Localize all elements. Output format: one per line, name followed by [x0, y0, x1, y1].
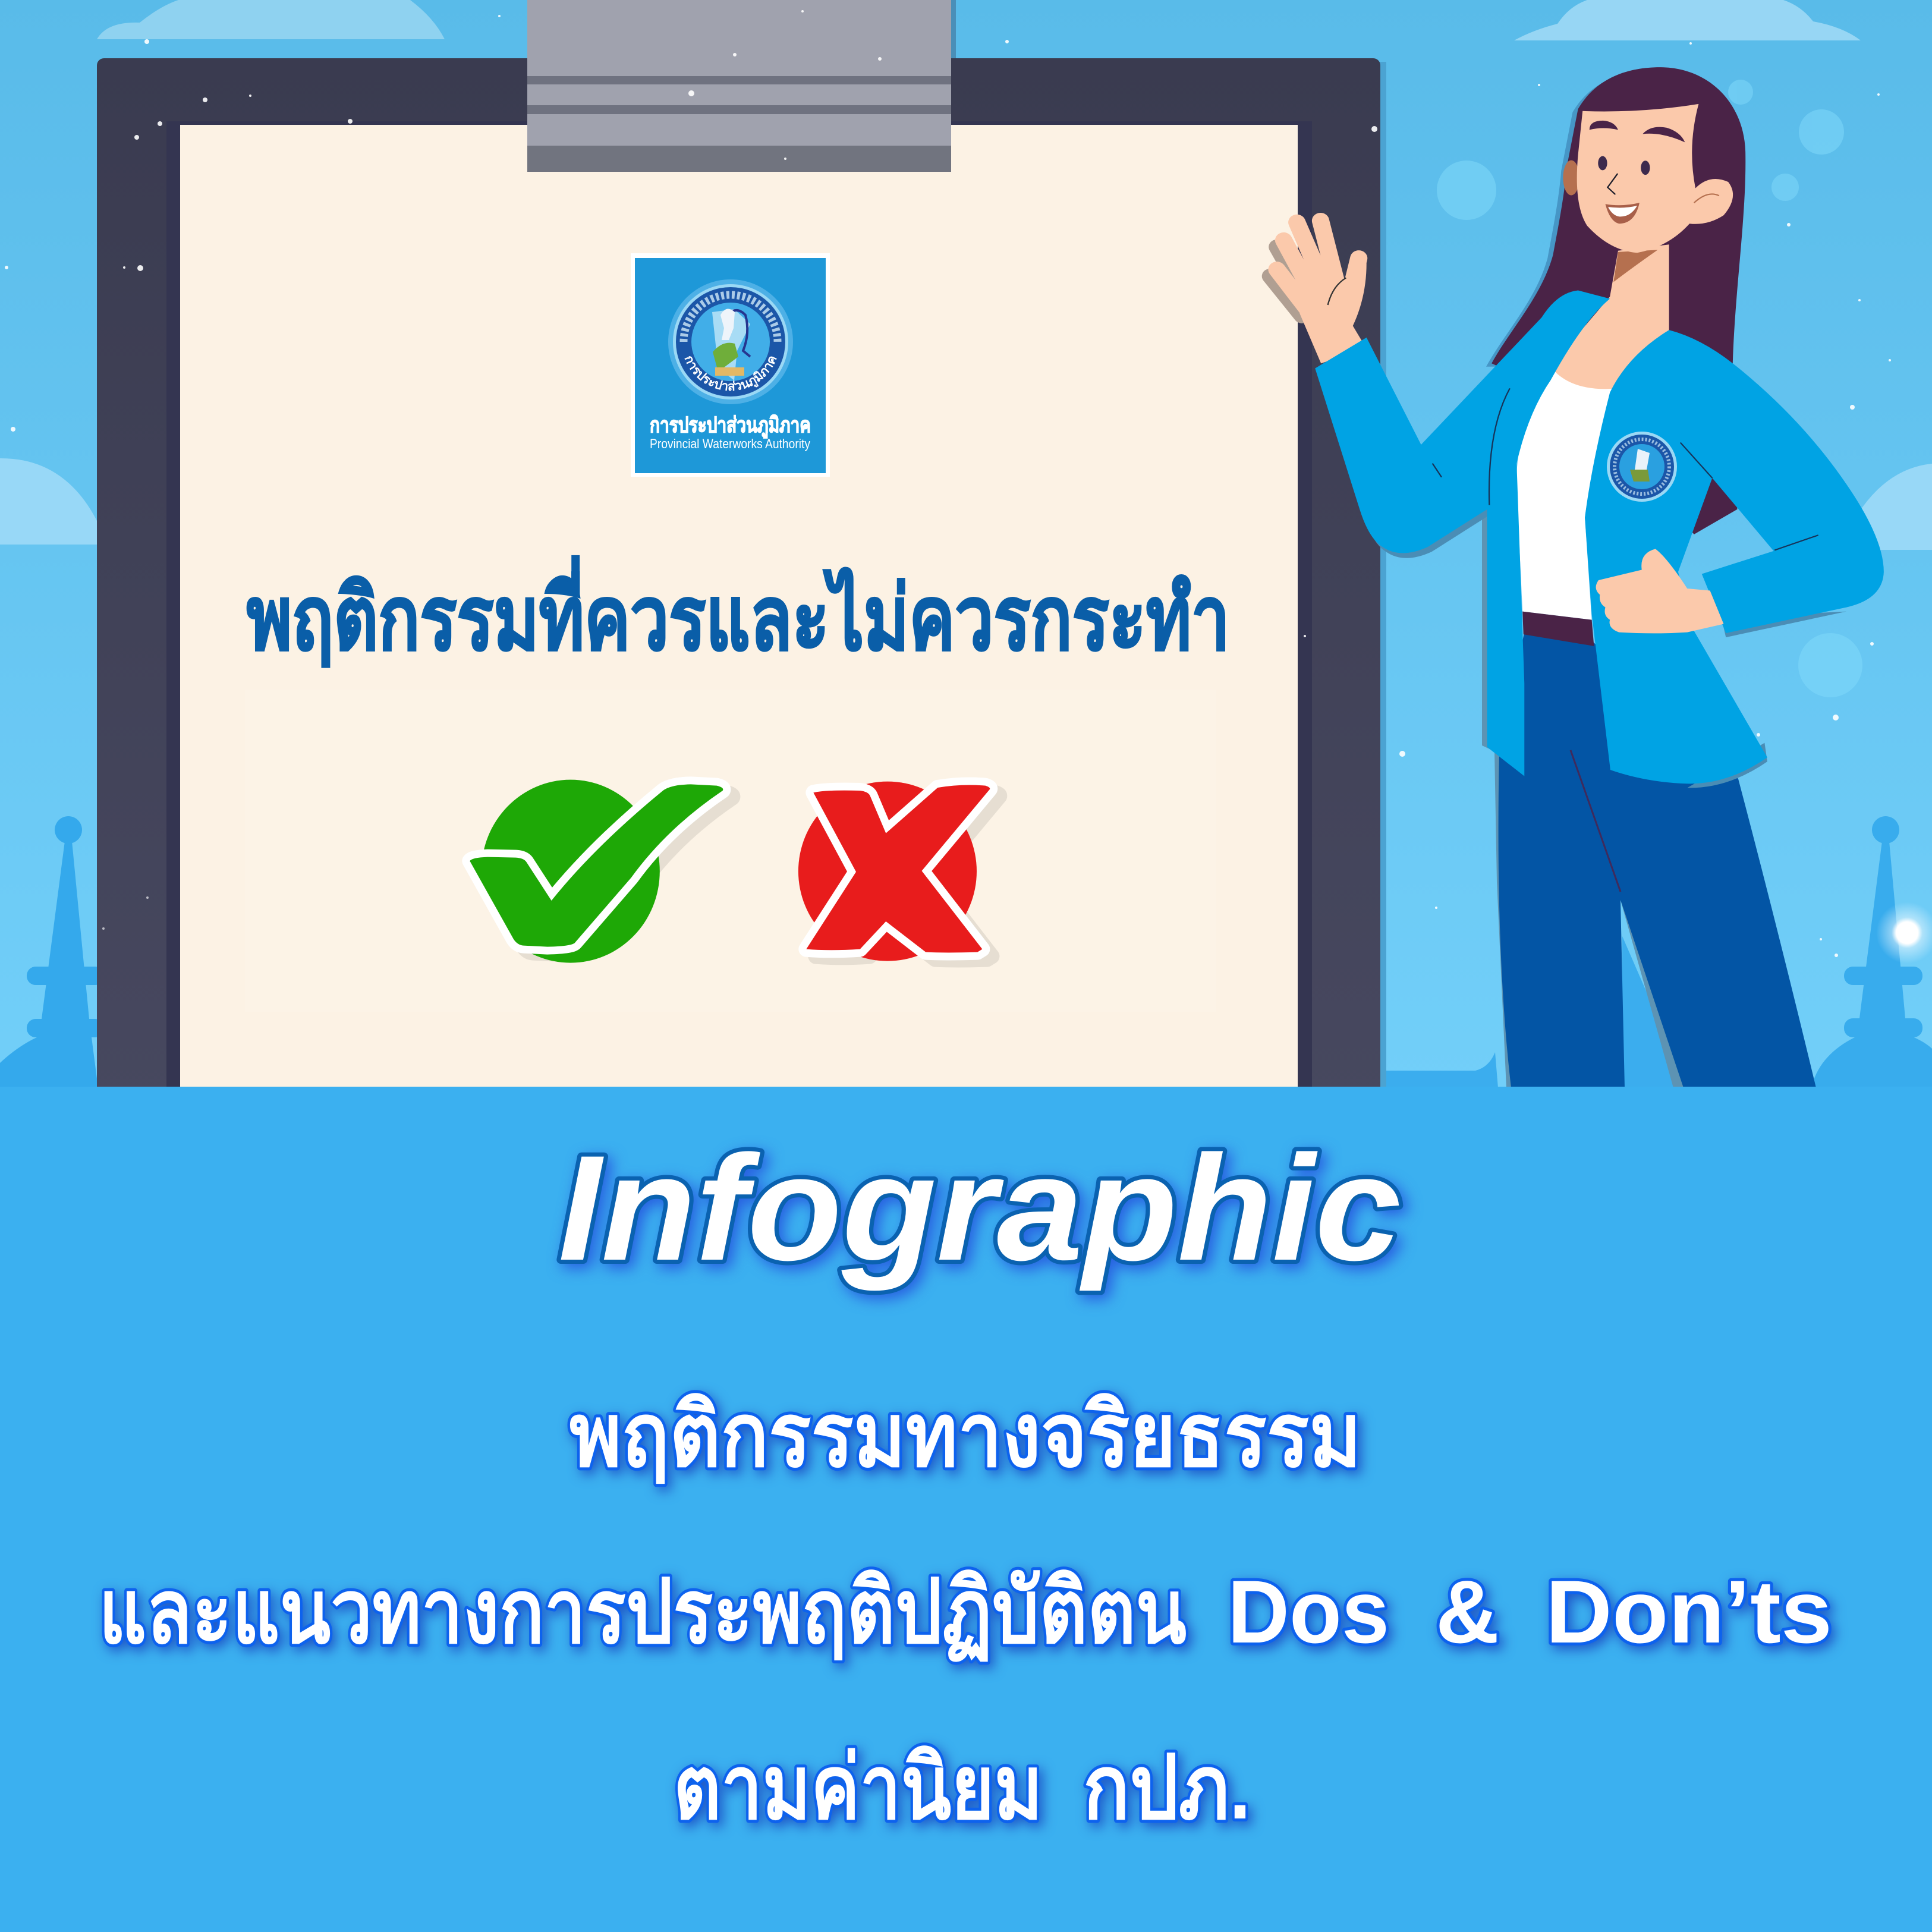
heading: clipboard: พฤติกรรมที่ควรและไม่ควรกระทำ [247, 556, 1230, 668]
panel: clipboard [97, 0, 1386, 1105]
subtitle line 1: พฤติกรรมทางจริยธรรม [569, 1385, 1361, 1485]
pants crease [1571, 750, 1621, 892]
icon: red cross mark [798, 782, 999, 961]
hand on hip [1596, 549, 1723, 633]
logo name English: Provincial Waterworks Authority [650, 436, 810, 451]
hair shadow [1486, 71, 1740, 367]
subtitle line 2: และแนวทางการประพฤติปฏิบัติตน [99, 1562, 1187, 1662]
panel: sky background [0, 0, 1932, 1088]
jacket edge shadow [1482, 505, 1492, 750]
temple base: behind figure [1386, 936, 1688, 1088]
shirt [1516, 370, 1619, 620]
pants [1499, 630, 1816, 1088]
ear detail [1694, 194, 1719, 203]
face [1577, 104, 1733, 253]
far ear [1563, 161, 1579, 195]
subtitle line 2: Dos [1228, 1562, 1389, 1662]
lens flare [1876, 902, 1932, 964]
cloud: right middle [1839, 464, 1932, 550]
icon: green check mark [470, 780, 732, 963]
logo: Provincial Waterworks Authority [631, 253, 830, 477]
cloud: top right [1514, 0, 1861, 40]
subtitle line 2: Don’ts [1546, 1562, 1832, 1662]
raised hand [1277, 221, 1367, 363]
subtitle line 3: ตามค่านิยม [674, 1738, 1043, 1837]
neck shadow [1613, 250, 1658, 282]
eyebrows [1590, 121, 1685, 142]
left sleeve and lapel [1315, 290, 1610, 684]
cloud: left middle [0, 458, 98, 545]
title: Infographic: Infographic [558, 1125, 1401, 1292]
nose [1607, 174, 1618, 194]
seal: การประปาส่วนภูมิภาค [684, 356, 777, 391]
bokeh circles [1437, 80, 1862, 697]
pants shadow [1494, 751, 1687, 1088]
subtitle line 2: & [1436, 1562, 1499, 1662]
right jacket shadow [1687, 612, 1846, 788]
jacket seams [1433, 388, 1818, 550]
eyes [1598, 156, 1650, 175]
palm line [1328, 278, 1346, 305]
belt [1522, 612, 1594, 646]
left sleeve shadow [1363, 493, 1491, 558]
logo name Thai: การประปาส่วนภูมิภาค [650, 413, 811, 439]
cloud: top left [97, 0, 445, 39]
panel: lower title area [0, 1087, 1932, 1932]
clipboard clamp [527, 0, 956, 172]
jacket badge [1607, 432, 1677, 502]
character: woman in blue jacket [1270, 67, 1884, 1088]
raised hand shadow [1270, 247, 1309, 316]
stars [5, 10, 1891, 957]
neck and chest [1537, 244, 1669, 405]
right jacket panel and sleeve [1585, 330, 1884, 784]
seal [668, 279, 793, 404]
temple silhouette: right [1811, 816, 1932, 1088]
temple silhouette: left [0, 816, 104, 1088]
mouth [1606, 203, 1640, 224]
left jacket hem [1487, 684, 1524, 776]
subtitle line 3: กปภ. [1083, 1738, 1251, 1837]
hair [1492, 67, 1745, 534]
teeth [1608, 206, 1637, 216]
